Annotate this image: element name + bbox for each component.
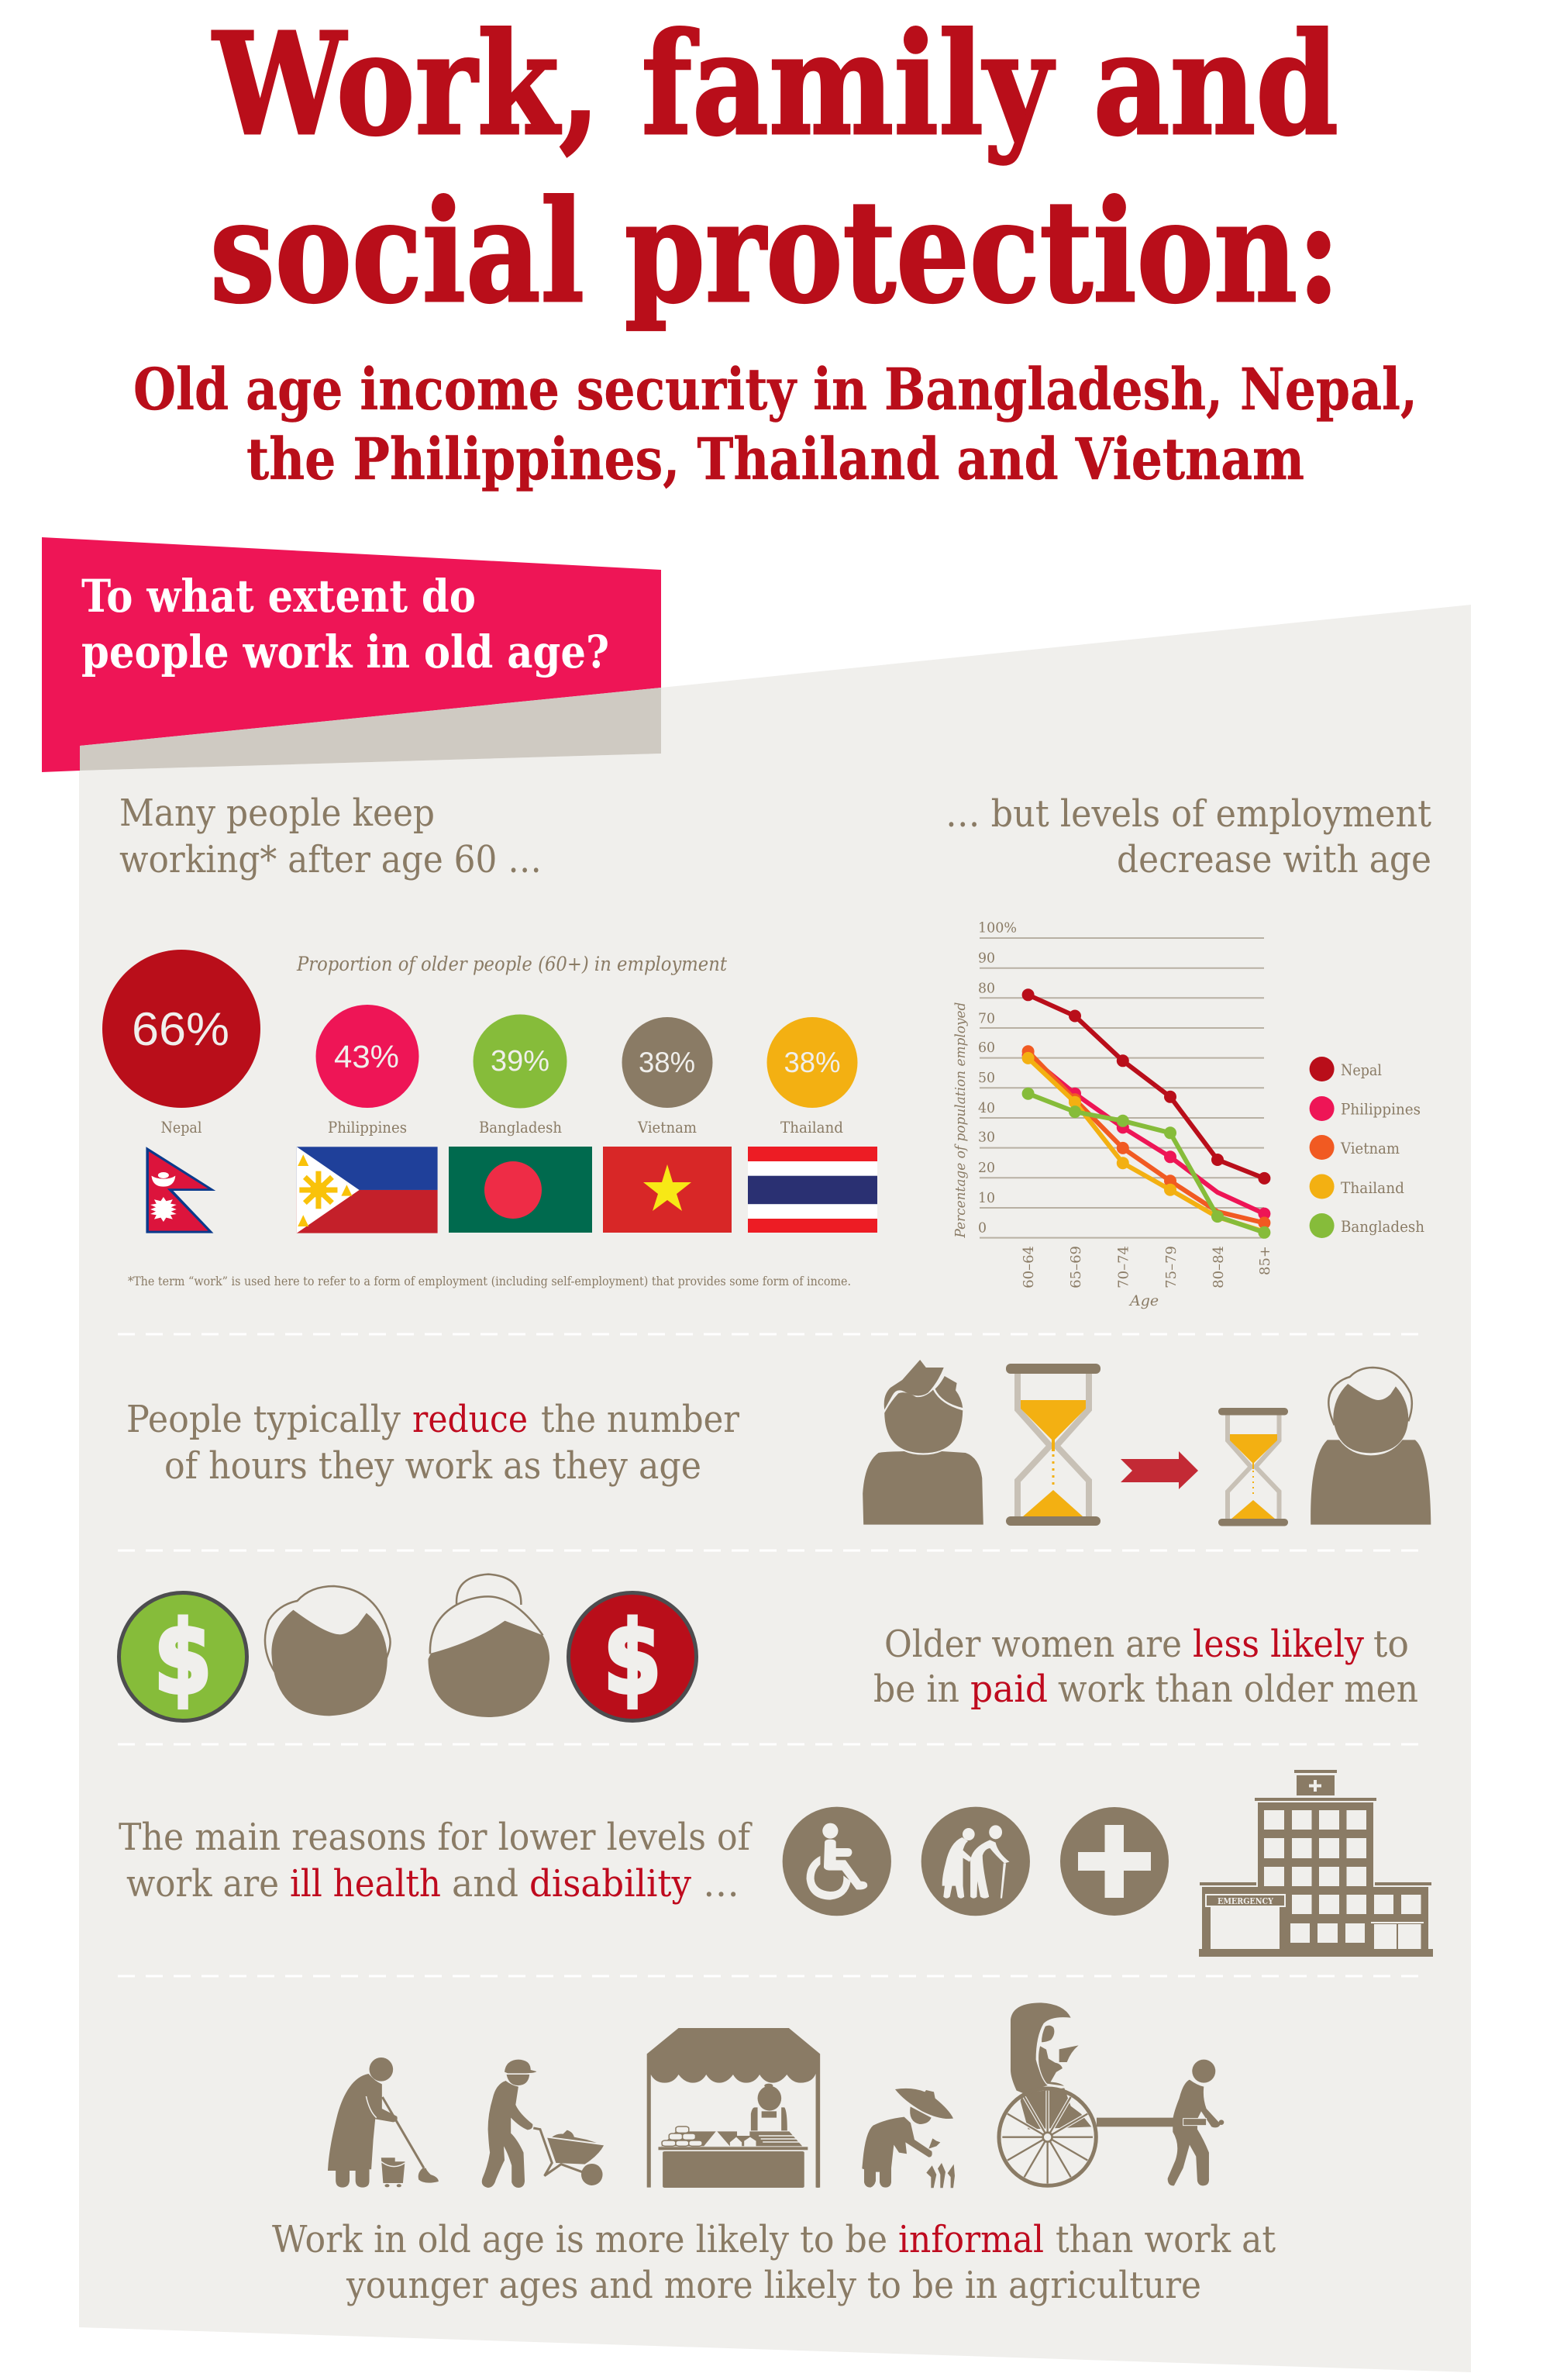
title: Work, family and <box>212 2 1338 167</box>
y axis numbers: 30 <box>978 1130 995 1146</box>
icon: woman head <box>428 1575 549 1717</box>
banner: section heading: To what extent do <box>81 570 476 623</box>
subtitle: the Philippines, Thailand and Vietnam <box>246 426 1304 493</box>
chart legend <box>1310 1057 1424 1238</box>
text: main reasons: disability <box>529 1862 691 1906</box>
y axis numbers: 10 <box>978 1190 995 1206</box>
chart legend: Bangladesh <box>1341 1217 1424 1236</box>
icon: farmer <box>862 2089 955 2188</box>
icon: rickshaw <box>999 2002 1224 2185</box>
icon: small hourglass <box>1218 1408 1288 1526</box>
country labels: Vietnam <box>637 1118 697 1137</box>
flag: Bangladesh <box>449 1147 592 1233</box>
series: Thailand <box>1022 1052 1264 1232</box>
y axis numbers: 50 <box>978 1070 995 1086</box>
icon: market stall <box>647 2028 820 2188</box>
chart legend: Philippines <box>1341 1100 1421 1119</box>
y axis numbers: 60 <box>978 1040 995 1056</box>
y axis numbers <box>978 920 1017 1236</box>
text: informal work: than work at <box>1056 2218 1276 2261</box>
text: older women less likely: be in <box>873 1668 959 1711</box>
text: older women less likely: paid <box>970 1668 1048 1711</box>
title <box>210 2 1340 334</box>
text: informal work: informal <box>898 2218 1044 2261</box>
flag: Nepal <box>146 1147 215 1233</box>
series: Vietnam <box>1022 1045 1270 1229</box>
icon: younger man <box>863 1360 983 1525</box>
text: employment decreases: … but levels of employment <box>946 792 1431 836</box>
chart legend: Vietnam <box>1340 1139 1400 1157</box>
arrow <box>1121 1451 1198 1489</box>
text: older women less likely: Older women are <box>884 1623 1182 1666</box>
banner: section heading <box>42 537 661 772</box>
flag: Thailand <box>748 1147 877 1233</box>
x axis labels: 80–84 <box>1211 1246 1227 1288</box>
text: older women less likely: to <box>1373 1623 1409 1666</box>
icon: elderly couple <box>921 1807 1030 1916</box>
text: older women less likely <box>873 1623 1418 1711</box>
icon: wheelbarrow worker <box>482 2060 604 2188</box>
text: many people keep working: Many people keep <box>119 792 435 835</box>
flag: Vietnam <box>603 1147 732 1233</box>
series: Philippines <box>1022 1049 1270 1220</box>
x axis title: Age <box>1128 1292 1159 1309</box>
text: main reasons: and <box>452 1862 518 1906</box>
bubble chart: proportion in employment: 39% <box>491 1045 549 1078</box>
icon: hospital <box>1199 1770 1433 1957</box>
text: main reasons: work are <box>126 1862 279 1906</box>
bubble chart: proportion in employment: 66% <box>132 1003 229 1055</box>
text: reduce hours: of hours they work as they age <box>164 1444 701 1488</box>
y axis numbers: 0 <box>978 1219 987 1236</box>
panel: main background <box>79 605 1471 2372</box>
chart legend: Thailand <box>1341 1178 1404 1197</box>
text: main reasons: ill health <box>290 1862 441 1906</box>
text: many people keep working <box>119 792 542 881</box>
icon: red dollar: $ <box>604 1601 661 1716</box>
subtitle <box>133 357 1417 493</box>
x axis labels: 85+ <box>1257 1246 1273 1275</box>
text: reduce hours: the number <box>541 1398 739 1441</box>
country labels <box>161 1118 843 1137</box>
title: social protection: <box>210 169 1340 334</box>
icon: green dollar: $ <box>154 1601 212 1716</box>
series: Bangladesh <box>1022 1088 1270 1239</box>
icon: older woman <box>1311 1368 1431 1525</box>
icon: green dollar <box>119 1592 246 1721</box>
chart caption: Proportion of older people (60+) in employment <box>296 953 728 975</box>
country labels: Bangladesh <box>479 1118 562 1137</box>
icon: hospital: EMERGENCY <box>1218 1896 1273 1906</box>
y axis numbers: 90 <box>978 950 995 967</box>
text: reduce hours: People typically <box>126 1398 401 1441</box>
footnote: *The term “work” is used here to refer to a form of employment (including self-employment) that provides some form of income. <box>128 1274 851 1288</box>
x axis labels: 60–64 <box>1021 1246 1037 1288</box>
text: employment decreases: decrease with age <box>1117 838 1431 881</box>
icon: large hourglass <box>1006 1364 1100 1526</box>
text: main reasons: … <box>703 1862 739 1906</box>
chart legend: Nepal <box>1341 1061 1382 1079</box>
country labels: Nepal <box>161 1118 202 1137</box>
icon: man head <box>265 1586 391 1716</box>
text: main reasons: The main reasons for lower levels of <box>119 1816 753 1859</box>
y axis numbers: 40 <box>978 1100 995 1116</box>
icon: street sweeper <box>328 2057 439 2188</box>
banner: section heading: people work in old age? <box>81 626 609 678</box>
x axis labels <box>1021 1246 1273 1288</box>
y axis title: Percentage of population employed <box>952 1002 969 1239</box>
text: employment decreases <box>946 792 1431 881</box>
text: informal work <box>272 2218 1276 2307</box>
bubble chart: proportion in employment <box>102 950 857 1109</box>
series: Nepal <box>1022 988 1270 1185</box>
bubble chart: proportion in employment: 38% <box>639 1047 695 1078</box>
icon: medical cross <box>1060 1807 1169 1916</box>
icon: red dollar <box>569 1592 696 1721</box>
x axis labels: 65–69 <box>1068 1246 1084 1288</box>
country labels: Thailand <box>780 1118 843 1137</box>
text: informal work: Work in old age is more likely to be <box>272 2218 887 2261</box>
y axis numbers: 20 <box>978 1160 995 1176</box>
dashed dividers <box>118 1334 1428 1976</box>
x axis labels: 75–79 <box>1163 1246 1180 1288</box>
line chart: employment by age <box>952 920 1273 1309</box>
country labels: Philippines <box>328 1118 407 1137</box>
flag: Philippines <box>297 1147 438 1233</box>
text: many people keep working: working* after age 60 … <box>119 838 542 881</box>
x axis labels: 70–74 <box>1116 1246 1132 1288</box>
text: older women less likely: less likely <box>1193 1623 1364 1666</box>
icon: wheelchair <box>783 1807 891 1916</box>
text: reduce hours <box>126 1398 739 1488</box>
y axis numbers: 70 <box>978 1010 995 1026</box>
y axis numbers: 100% <box>978 920 1017 936</box>
text: informal work: younger ages and more likely to be in agriculture <box>346 2264 1201 2307</box>
bubble chart: proportion in employment: 43% <box>334 1039 399 1074</box>
y axis numbers: 80 <box>978 980 995 997</box>
text: reduce hours: reduce <box>412 1398 528 1441</box>
text: main reasons <box>119 1816 753 1906</box>
text: older women less likely: work than older men <box>1058 1668 1418 1711</box>
bubble chart: proportion in employment: 38% <box>784 1047 840 1078</box>
